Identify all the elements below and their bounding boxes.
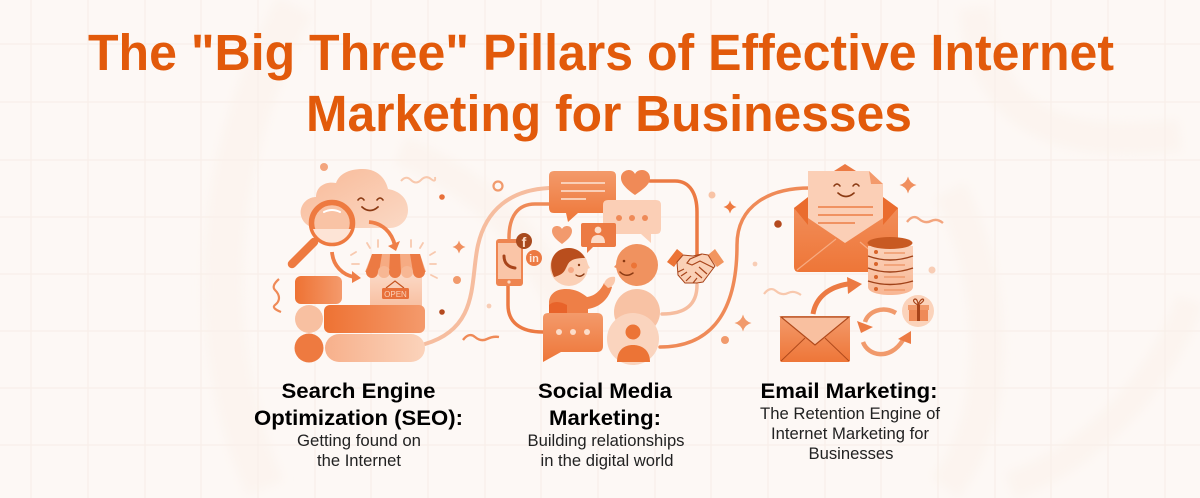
icon: phone bbox=[496, 239, 523, 286]
text: search engine optimization: Optimization (SEO): bbox=[254, 406, 463, 430]
icon: contact bubble bbox=[581, 223, 616, 253]
icon: open envelope with letter bbox=[794, 164, 898, 272]
arrow: small envelope to database bbox=[813, 277, 862, 314]
illustration: email bbox=[753, 164, 943, 362]
text: social media marketing: Social Media bbox=[538, 379, 673, 403]
icon: dotted chat bubble bbox=[603, 200, 661, 243]
icon: facebook badge bbox=[516, 233, 532, 250]
decorative dots bbox=[494, 182, 752, 344]
title: Marketing for Businesses bbox=[306, 85, 912, 142]
connector lines between pillars bbox=[425, 181, 810, 347]
text: email marketing: The Retention Engine of bbox=[760, 405, 940, 423]
text: email marketing: Email Marketing: bbox=[760, 379, 938, 403]
icon: magnifying glass bbox=[292, 202, 352, 264]
icon: closed envelope bbox=[780, 316, 850, 362]
text: search engine optimization: Getting found on bbox=[297, 432, 421, 450]
icon: dotted chat bubble bottom bbox=[543, 313, 603, 362]
icon: store with open sign bbox=[351, 240, 437, 306]
text: search engine optimization: Search Engine bbox=[282, 379, 436, 403]
illustration: social media bbox=[494, 170, 752, 365]
text: email marketing: Businesses bbox=[808, 445, 894, 463]
icon: large heart bbox=[621, 170, 650, 195]
title: The "Big Three" Pillars of Effective Internet bbox=[88, 24, 1114, 81]
icon: gift badge bbox=[902, 295, 934, 327]
block stack bbox=[294, 276, 425, 362]
illustration: SEO bbox=[274, 163, 499, 362]
text: social media marketing: in the digital world bbox=[540, 452, 674, 470]
text: email marketing: Internet Marketing for bbox=[771, 425, 930, 443]
text: social media marketing: Marketing: bbox=[549, 406, 661, 430]
icon: handshake bbox=[667, 249, 724, 283]
icon: man talking bbox=[549, 248, 615, 316]
icon: user avatars bbox=[607, 289, 660, 365]
icon: database bbox=[868, 237, 913, 295]
title bbox=[88, 24, 1114, 142]
text: email marketing bbox=[760, 379, 940, 463]
icon: facebook badge: f bbox=[522, 234, 527, 250]
text: search engine optimization bbox=[254, 379, 463, 470]
icon: chat bubble with lines bbox=[549, 171, 616, 222]
decorative elements bbox=[753, 176, 943, 295]
decorative dots and squiggles bbox=[274, 163, 499, 340]
icon: small heart bbox=[552, 226, 572, 244]
icon: refresh cycle arrows bbox=[857, 310, 911, 354]
icon: smiling cloud bbox=[301, 169, 408, 228]
text: social media marketing bbox=[528, 379, 684, 470]
icon: linkedin badge: in bbox=[529, 253, 539, 265]
arrows to store bbox=[332, 222, 400, 283]
text: social media marketing: Building relationships bbox=[528, 432, 684, 450]
icon: smiling person head bbox=[614, 244, 658, 286]
text: search engine optimization: the Internet bbox=[317, 452, 401, 470]
icon: linkedin badge bbox=[526, 250, 542, 266]
icon: store with open sign: OPEN bbox=[384, 290, 407, 299]
